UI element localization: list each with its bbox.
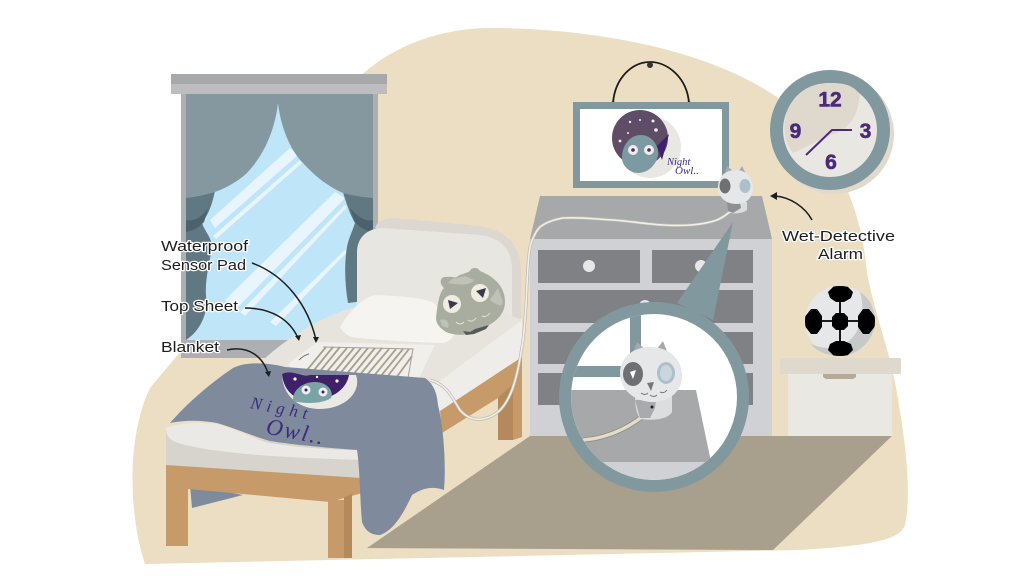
framed logo — [612, 110, 681, 178]
upper curtains — [186, 94, 373, 198]
label: Waterproof Sensor Pad — [161, 238, 319, 343]
label: Wet-Detective Alarm — [770, 192, 895, 263]
lens owl alarm — [620, 341, 682, 420]
blanket brand script: Owl.. — [264, 414, 328, 450]
mattress top — [263, 304, 522, 400]
side rail — [440, 357, 522, 433]
sky — [186, 94, 373, 340]
label: Waterproof Sensor Pad: Sensor Pad — [161, 257, 246, 274]
mattress side — [425, 318, 522, 411]
clock numerals: 3 — [860, 120, 871, 143]
foot mattress — [166, 424, 362, 478]
label: Waterproof Sensor Pad: Waterproof — [161, 238, 249, 255]
clock rim — [770, 70, 890, 190]
label: Wet-Detective Alarm: Wet-Detective — [782, 228, 895, 245]
headboard — [375, 218, 521, 330]
curtain fold shadows — [186, 208, 373, 232]
lower curtain left — [186, 191, 215, 340]
clock numerals: 12 — [818, 88, 842, 112]
window — [171, 74, 387, 358]
framed brand script — [666, 157, 699, 177]
framed brand script: Night — [666, 157, 691, 168]
window sill and frame — [181, 94, 378, 358]
label: Wet-Detective Alarm: Alarm — [818, 246, 863, 263]
knobs — [583, 260, 595, 272]
blanket logo — [282, 372, 357, 409]
plush owl on bed — [436, 268, 505, 335]
hanger — [613, 62, 689, 103]
label: Top Sheet: Top Sheet — [161, 298, 239, 315]
arrow to blanket — [227, 349, 271, 377]
clock — [770, 70, 894, 194]
label: Top Sheet — [161, 298, 301, 341]
front right leg — [328, 500, 344, 558]
clock numerals: 9 — [790, 120, 801, 143]
bed — [166, 218, 522, 558]
blanket underhang — [190, 485, 243, 508]
framed brand script: Owl.. — [675, 165, 699, 177]
background wall blob — [132, 28, 908, 564]
arrow to alarm — [770, 192, 812, 220]
nightstand — [780, 358, 901, 436]
arrow to sensor pad — [252, 263, 319, 343]
clock hands — [806, 130, 852, 155]
soccer ball — [804, 286, 876, 356]
magnifier lens — [559, 222, 750, 492]
lens ring — [559, 302, 749, 492]
frame border — [576, 106, 726, 184]
drawers — [538, 250, 640, 283]
front rail — [166, 465, 362, 502]
front left leg — [166, 487, 188, 546]
clock shadow — [774, 74, 894, 194]
clock face — [783, 83, 877, 177]
blanket brand script — [244, 393, 331, 450]
label: Blanket: Blanket — [161, 339, 220, 356]
clock numerals: 6 — [825, 151, 837, 174]
blanket — [170, 363, 445, 535]
dresser body — [530, 239, 772, 436]
rug — [367, 436, 892, 550]
sensor pad — [303, 347, 413, 378]
label: Blanket — [161, 339, 271, 377]
lower curtain right — [343, 192, 373, 303]
lens pointer — [677, 222, 733, 320]
lens view — [571, 314, 737, 480]
picture frame — [576, 62, 726, 184]
pillow — [340, 295, 455, 343]
dresser top — [530, 196, 772, 239]
dresser — [530, 196, 772, 436]
cornice — [171, 74, 387, 94]
blanket brand script: Night — [248, 393, 314, 424]
sensor cord — [430, 207, 735, 419]
back right leg — [498, 357, 522, 440]
sheet — [288, 342, 435, 384]
wet detective owl alarm — [718, 166, 753, 213]
arrow to top sheet — [245, 308, 301, 341]
clock numerals — [790, 88, 871, 174]
glass reflections — [210, 148, 347, 326]
sheet logo mark — [299, 354, 309, 360]
